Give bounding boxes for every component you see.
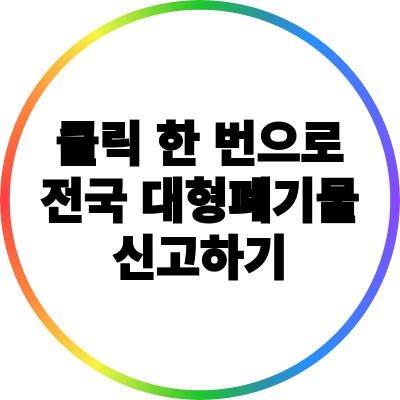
title: 클릭 한 번으로 bbox=[56, 119, 344, 172]
title bbox=[40, 119, 360, 286]
title: 신고하기 bbox=[113, 233, 287, 286]
title: 전국 대형폐기물 bbox=[40, 176, 360, 229]
